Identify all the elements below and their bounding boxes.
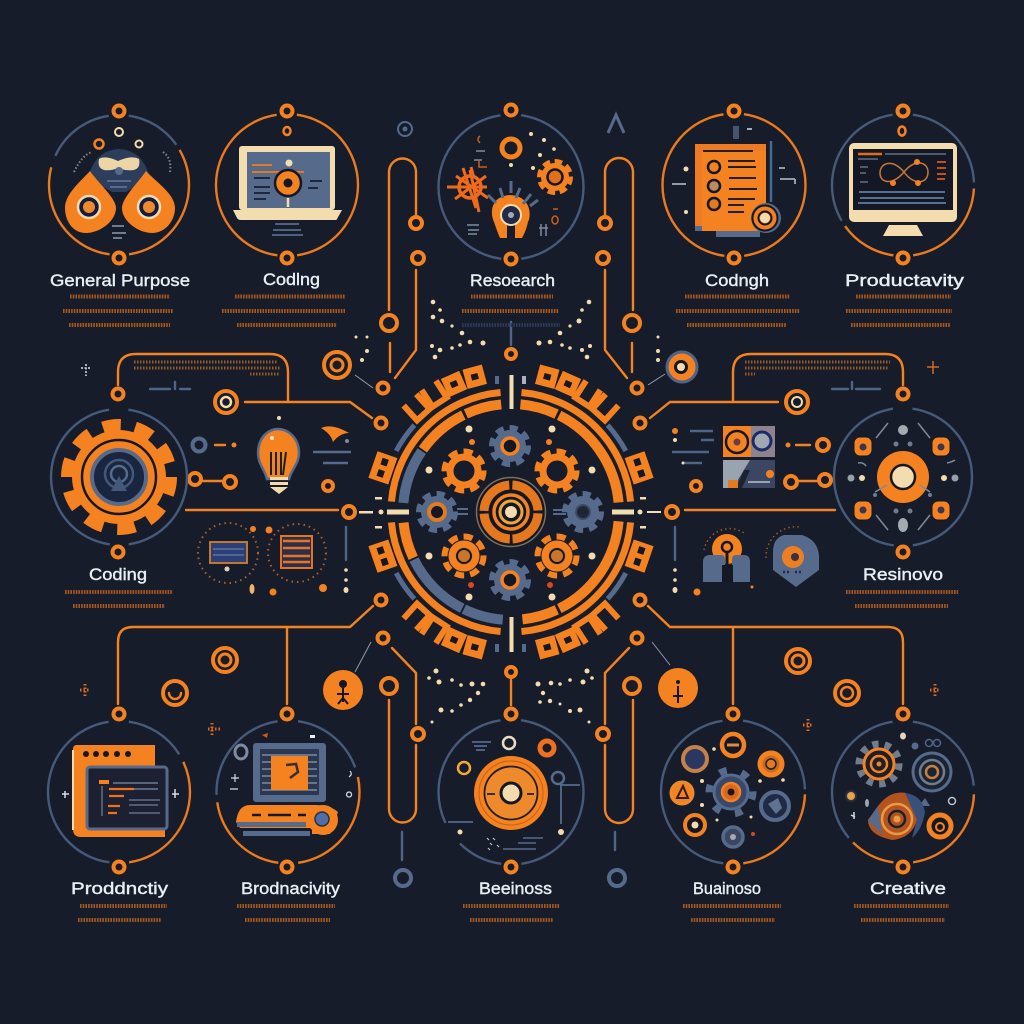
sub-text lines — [63, 296, 173, 325]
panel: Broductivity (computer) — [216, 720, 360, 920]
label: Brodnacity: Brodnacivity — [241, 879, 341, 898]
outer arc ring — [391, 392, 631, 632]
panel: Coding (laptop) — [216, 114, 358, 325]
icon: two teardrops and masked head — [65, 128, 175, 238]
small dots around gears — [426, 426, 596, 600]
panel: Research — [438, 114, 584, 325]
sub-text lines — [846, 592, 958, 606]
icon: target disc — [448, 737, 580, 850]
sub-text lines — [463, 906, 560, 920]
icon: ring of badges around gear — [671, 734, 789, 847]
circuit lines — [118, 158, 903, 860]
label: General Purpose: General Purpose — [50, 271, 190, 290]
icon: light bulb — [258, 416, 351, 494]
panel: Business (disc) — [438, 720, 584, 920]
icon: computer terminal — [230, 733, 352, 836]
icon: bulb, gear and star — [447, 132, 570, 238]
icon: app window — [62, 745, 179, 837]
sub-text lines — [676, 296, 800, 325]
panel: Creative — [832, 721, 974, 920]
label: Coding: Codlng — [263, 270, 320, 289]
icon: creative gears and spirals — [846, 732, 956, 840]
inner segmented ring — [403, 404, 619, 620]
icon: document list — [672, 126, 795, 237]
label: Coding: Codngh — [705, 271, 769, 290]
label: Resinovo: Resinovo — [863, 565, 943, 584]
sub-text lines — [65, 592, 172, 606]
sub-text lines — [462, 296, 559, 311]
label: Creative: Creative — [870, 879, 946, 898]
large concentric nodes — [163, 115, 859, 886]
label: Business: Beeinoss — [479, 879, 552, 898]
panel: General Purpose — [49, 115, 190, 325]
label: Research: Resoearch — [470, 271, 555, 290]
outer blocks — [368, 365, 654, 659]
panel: Resinovo — [834, 408, 972, 606]
panel: Business (orbit icons) — [661, 720, 805, 920]
icon: laptop — [233, 127, 342, 235]
centre hub — [476, 478, 546, 546]
icon: monitor with infinity — [849, 126, 957, 236]
panel: Productivity (monitor) — [832, 114, 974, 325]
icon: shield and lock right — [694, 527, 819, 596]
scattered cream dots — [344, 300, 678, 724]
label: Productivity: Proddnctiy — [71, 879, 169, 898]
panel: Productivity (window) — [48, 721, 190, 920]
sub-text lines — [222, 296, 345, 325]
central mandala — [359, 365, 661, 659]
orbit gears — [419, 428, 601, 598]
sub-text lines — [854, 906, 949, 920]
icon: dotted mini panels left — [198, 523, 327, 596]
connector nodes — [112, 104, 908, 872]
icon: gear — [69, 427, 169, 527]
label: Coding: Coding — [89, 565, 147, 584]
sub-text lines — [237, 906, 335, 920]
panel: Coding (document) — [662, 114, 806, 325]
panel: Coding (gear) — [51, 409, 187, 606]
label: Business: Buainoso — [693, 879, 761, 898]
dotted bands — [80, 361, 940, 735]
icon: orbit hub — [848, 423, 958, 532]
axis bars — [359, 375, 661, 652]
label: Productivity: Productavity — [845, 271, 965, 290]
blue accent arcs — [381, 382, 641, 642]
sub-text lines — [683, 906, 781, 920]
sub-text lines — [78, 906, 167, 920]
icon: mosaic panel right — [672, 426, 775, 488]
sub-text lines — [846, 296, 952, 325]
